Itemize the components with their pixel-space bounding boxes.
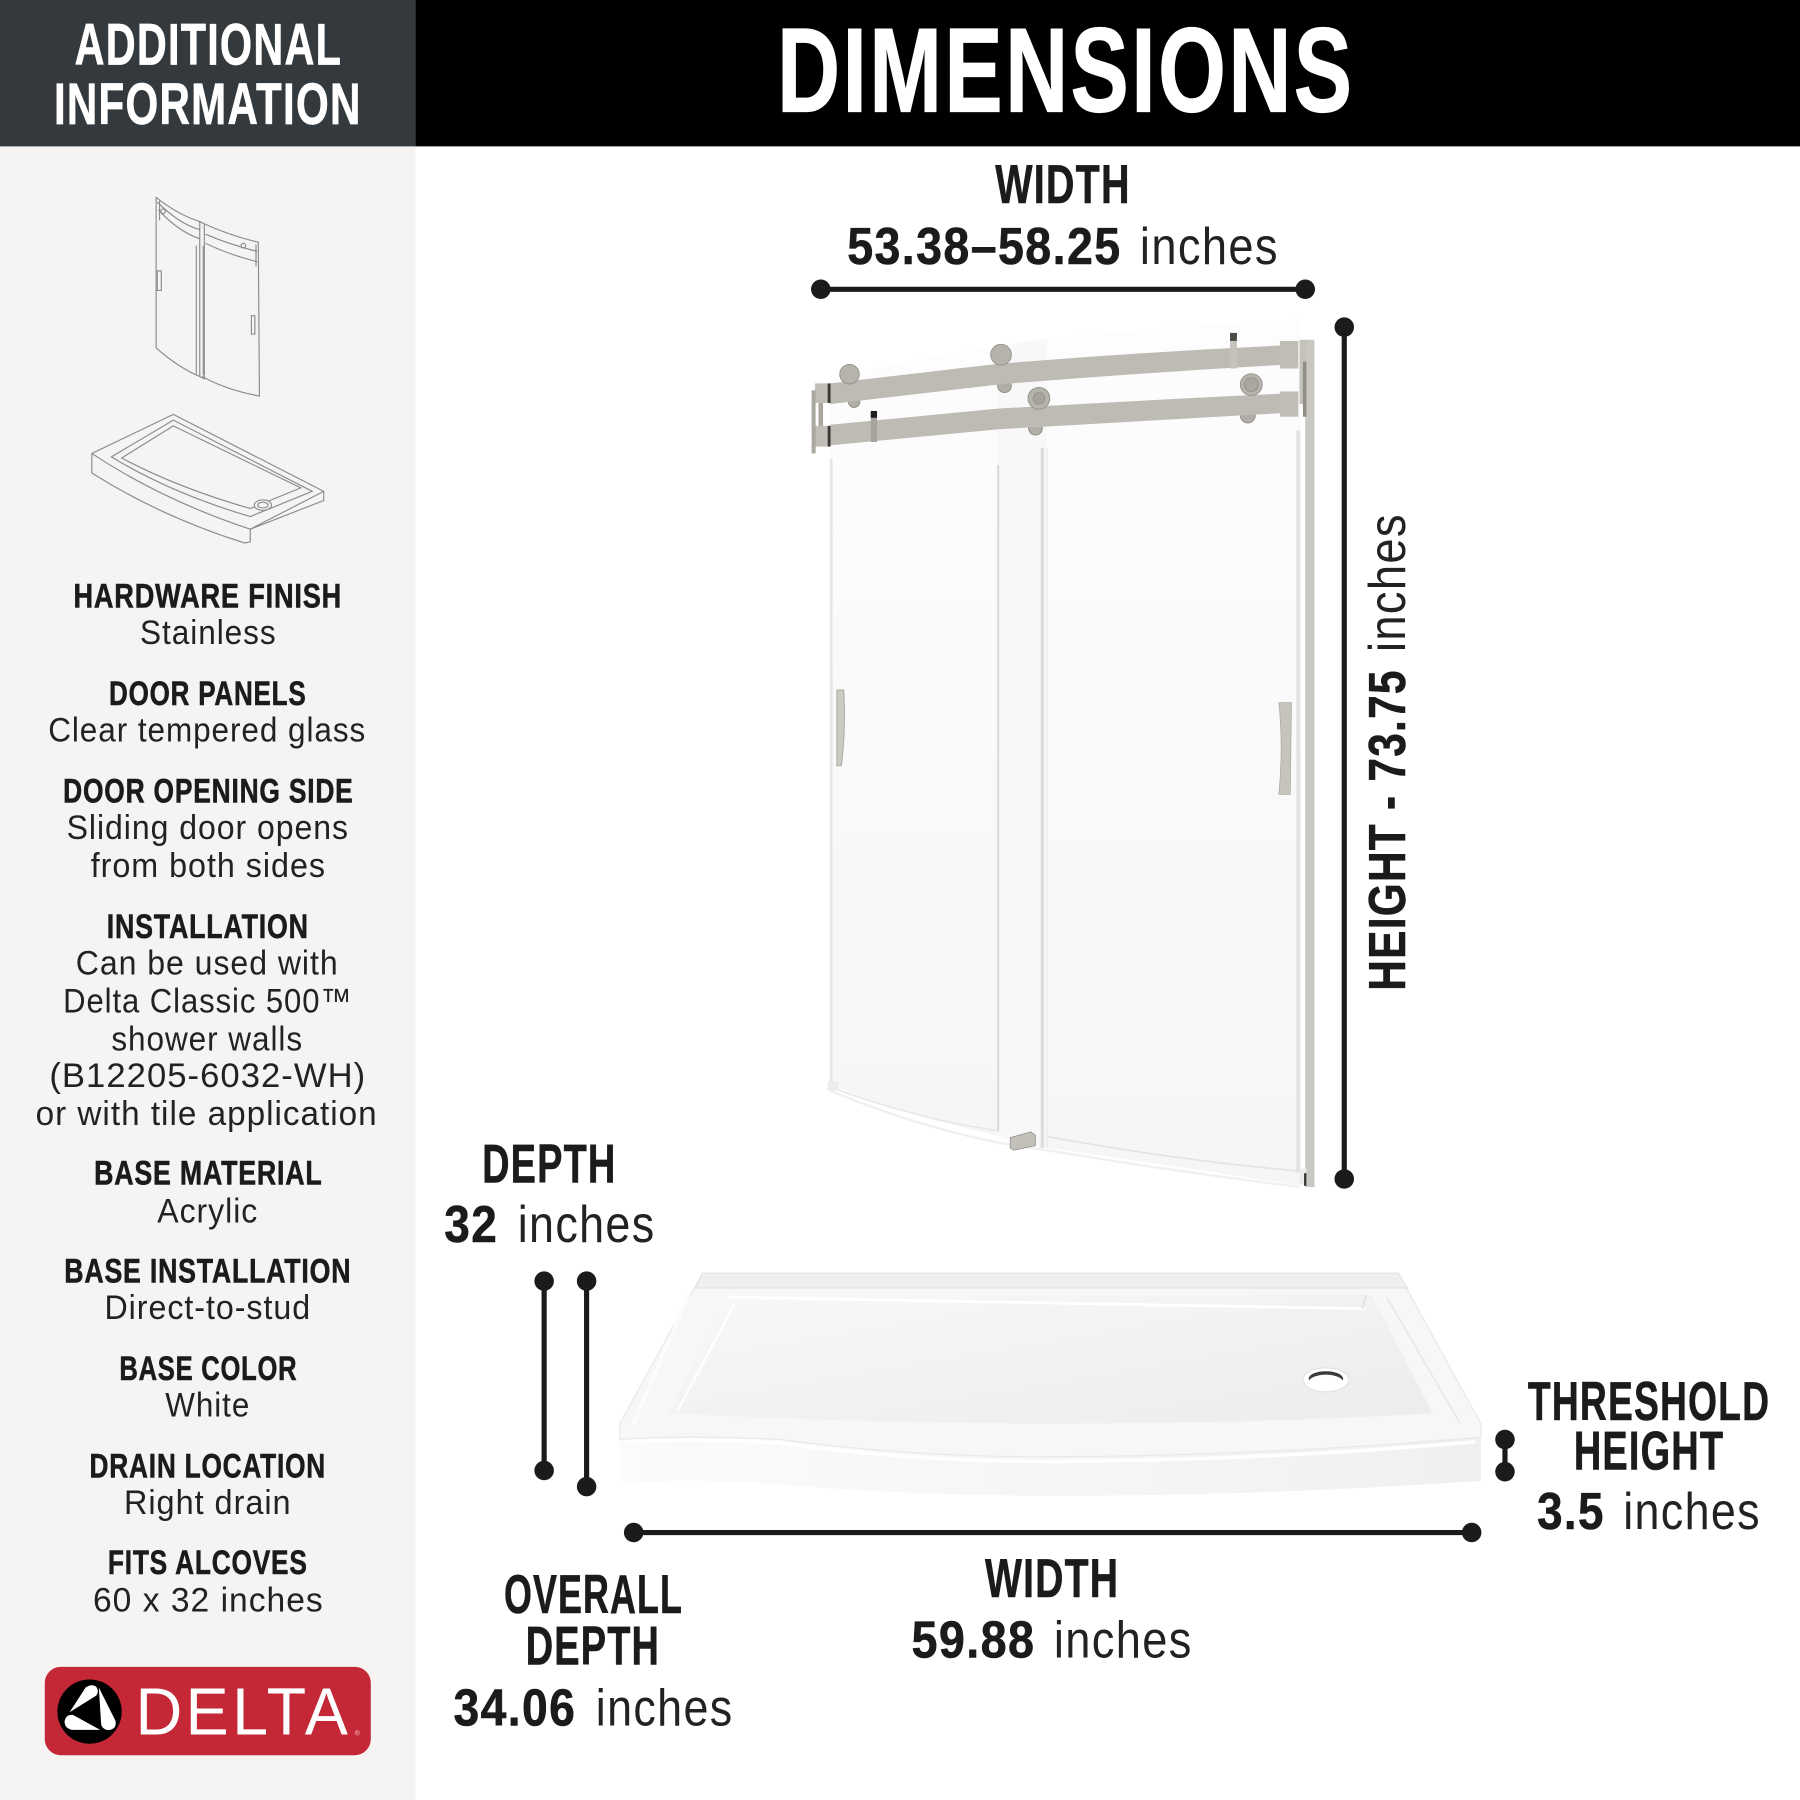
inner contour lines: [626, 1295, 1475, 1461]
base depth label: 32: [444, 1195, 498, 1253]
back flange: [696, 1273, 1407, 1288]
right door handle: [1279, 703, 1291, 794]
right glass panel: [1047, 319, 1301, 1186]
door width label: WIDTH: [995, 153, 1131, 215]
sidebar header: INFORMATION: [54, 72, 362, 137]
spec: installation: [36, 908, 378, 1133]
spec: base material: Acrylic: [157, 1193, 258, 1231]
door height arrow: [1335, 317, 1354, 1189]
door width label: 53.38–58.25: [847, 217, 1122, 275]
spec: base installation: BASE INSTALLATION: [64, 1252, 351, 1290]
rear rollers: [848, 379, 1255, 435]
spec: hardware finish: [73, 577, 342, 652]
door width arrow: [811, 280, 1315, 299]
base depth label: DEPTH: [482, 1132, 616, 1194]
floor: [669, 1295, 1433, 1423]
left glass panel: [830, 339, 1047, 1148]
spec: fits alcoves: FITS ALCOVES: [108, 1544, 308, 1582]
threshold height label: 3.5: [1537, 1482, 1605, 1540]
overall depth label: OVERALL: [504, 1563, 683, 1625]
base depth label: [444, 1132, 655, 1253]
door floor guide: [828, 1081, 1035, 1150]
spec: door panels: Clear tempered glass: [48, 712, 366, 750]
door height label: inches: [1358, 513, 1416, 652]
base width label: WIDTH: [985, 1547, 1119, 1609]
main title banner: DIMENSIONS: [777, 4, 1355, 137]
threshold height label: [1528, 1370, 1770, 1540]
overall depth label: 34.06: [453, 1678, 576, 1736]
door width label: inches: [1140, 217, 1279, 275]
door width label: [847, 153, 1279, 275]
spec: door opening side: Sliding door opens: [67, 809, 349, 847]
door height label: HEIGHT - 73.75: [1358, 669, 1416, 991]
spec: door panels: DOOR PANELS: [109, 675, 307, 713]
spec: hardware finish: Stainless: [140, 614, 277, 652]
threshold height label: HEIGHT: [1574, 1419, 1724, 1481]
spec: installation: INSTALLATION: [107, 908, 309, 946]
spec: hardware finish: HARDWARE FINISH: [73, 577, 342, 615]
spec: base material: [94, 1155, 323, 1231]
deck: [620, 1273, 1481, 1457]
base depth arrow: [534, 1271, 554, 1480]
panel: additional information sidebar: [0, 0, 416, 1800]
spec: drain location: [90, 1447, 326, 1522]
spec: base material: BASE MATERIAL: [94, 1155, 323, 1193]
logo: Delta: [45, 1667, 371, 1755]
overall depth label: inches: [596, 1678, 734, 1736]
spec: installation: (B12205-6032-WH): [49, 1057, 366, 1095]
base depth label: inches: [518, 1195, 655, 1253]
spec: door panels: [48, 675, 366, 750]
shower door illustration: [812, 319, 1314, 1187]
threshold height label: inches: [1623, 1482, 1761, 1540]
spec: base installation: Direct-to-stud: [104, 1289, 311, 1327]
logo: Delta: ®: [355, 1730, 360, 1738]
overlap panel shading: [998, 339, 1047, 1148]
main title banner: [416, 0, 1800, 146]
front wall: [620, 1437, 1481, 1496]
spec: base color: White: [165, 1387, 250, 1425]
overall depth label: [453, 1563, 734, 1736]
front rollers: [840, 344, 1262, 409]
icon: shower base line drawing: [92, 414, 324, 543]
spec: installation: Can be used with: [76, 945, 339, 983]
base width label: inches: [1054, 1611, 1193, 1669]
track stops: [871, 333, 1237, 442]
right wall channel: [1299, 340, 1314, 1187]
left door handle: [837, 690, 845, 766]
spec: fits alcoves: [93, 1544, 324, 1620]
spec: installation: shower walls: [111, 1020, 303, 1058]
overall depth arrow: [577, 1271, 596, 1496]
shower base illustration: [620, 1273, 1481, 1496]
base width label: [911, 1547, 1193, 1669]
spec: door opening side: DOOR OPENING SIDE: [63, 772, 354, 810]
spec: base color: [119, 1350, 297, 1425]
lower track: [830, 394, 1280, 445]
sidebar header: [0, 0, 416, 146]
base width label: 59.88: [911, 1611, 1035, 1669]
spec: fits alcoves: 60 x 32 inches: [93, 1582, 324, 1620]
upper track: [830, 346, 1280, 404]
glass edges: [830, 430, 1299, 1187]
logo: Delta: DELTA: [135, 1676, 351, 1750]
spec: drain location: Right drain: [124, 1484, 292, 1522]
base width arrow: [624, 1523, 1481, 1542]
threshold height arrow: [1495, 1430, 1515, 1481]
spec: door opening side: from both sides: [91, 847, 326, 885]
icon: shower door line drawing: [156, 197, 259, 396]
spec: base installation: [64, 1252, 351, 1327]
drain: [1303, 1368, 1349, 1392]
spec: base color: BASE COLOR: [119, 1350, 297, 1388]
sidebar header: ADDITIONAL: [75, 12, 342, 77]
spec: drain location: DRAIN LOCATION: [90, 1447, 326, 1485]
spec: door opening side: [63, 772, 354, 885]
spec: installation: Delta Classic 500™: [63, 983, 352, 1021]
spec: installation: or with tile application: [36, 1095, 378, 1133]
track end brackets: [812, 341, 1298, 453]
overall depth label: DEPTH: [526, 1615, 660, 1677]
